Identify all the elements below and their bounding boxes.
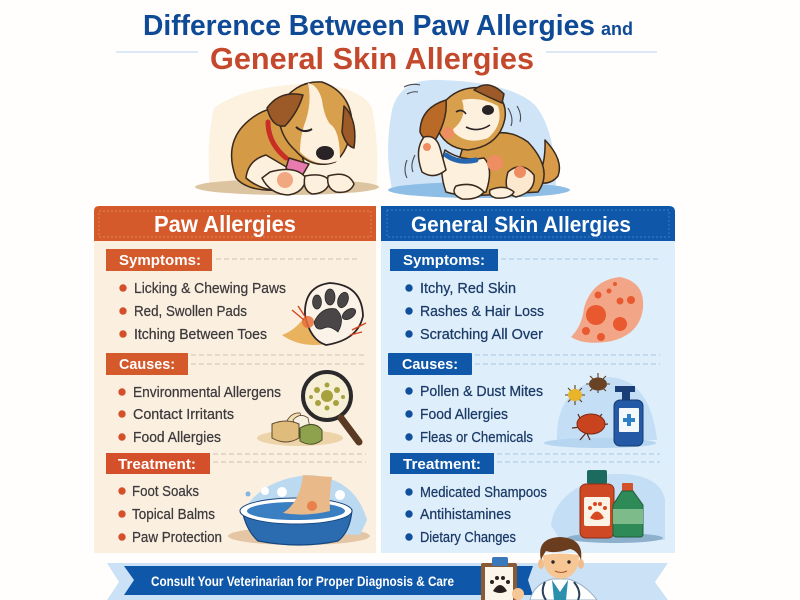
section: paw symptoms: Itching Between Toes <box>134 326 267 343</box>
section: paw causes: Environmental Allergens <box>133 384 281 401</box>
section: skin causes <box>388 353 660 446</box>
icon: veterinarian <box>512 537 597 600</box>
section: skin symptoms: Scratching All Over <box>420 326 543 343</box>
panel header: paw allergies: Paw Allergies <box>154 211 296 237</box>
title: and <box>601 19 633 39</box>
section: paw treatment: Treatment: <box>118 456 196 473</box>
illustration: dog scratching <box>388 80 570 199</box>
title <box>116 10 657 76</box>
section: paw symptoms <box>106 249 360 343</box>
panel: general skin allergies <box>381 206 675 553</box>
icon: magnifier and balms <box>257 372 359 446</box>
title: Difference Between Paw Allergies <box>143 10 595 42</box>
section: skin symptoms: Itchy, Red Skin <box>420 280 516 297</box>
section: skin symptoms: Symptoms: <box>403 252 485 269</box>
footer banner <box>107 563 668 600</box>
icon: clipboard with paw <box>481 557 517 600</box>
section: paw treatment: Topical Balms <box>132 506 215 523</box>
section: paw causes: Food Allergies <box>133 429 221 446</box>
section: skin causes: Causes: <box>402 356 458 373</box>
section: skin causes: Food Allergies <box>420 406 508 423</box>
panel header: paw allergies <box>94 206 376 241</box>
section: paw causes: Causes: <box>119 356 175 373</box>
icon: mites and shampoo <box>544 373 657 448</box>
panel header: general skin allergies <box>381 206 675 241</box>
title: General Skin Allergies <box>210 41 534 76</box>
section: skin symptoms: Rashes & Hair Loss <box>420 303 544 320</box>
footer banner: Consult Your Veterinarian for Proper Diagnosis & Care <box>151 573 454 589</box>
section: skin treatment: Medicated Shampoos <box>420 484 547 501</box>
section: skin treatment <box>390 453 660 546</box>
section: skin treatment: Dietary Changes <box>420 529 516 546</box>
section: paw treatment: Paw Protection <box>132 529 222 546</box>
panel header: general skin allergies: General Skin Allergies <box>411 212 631 237</box>
section: skin treatment: Antihistamines <box>420 506 511 523</box>
section: paw treatment: Foot Soaks <box>132 483 199 500</box>
section: skin symptoms <box>390 249 660 343</box>
section: paw causes <box>106 353 365 446</box>
section: skin treatment: Treatment: <box>403 456 481 473</box>
icon: medicine bottles <box>551 470 665 543</box>
section: paw symptoms: Licking & Chewing Paws <box>134 280 286 297</box>
section: skin causes: Pollen & Dust Mites <box>420 383 543 400</box>
section: paw symptoms: Red, Swollen Pads <box>134 303 247 320</box>
illustration: dog licking paw <box>195 82 379 195</box>
icon: irritated paw <box>282 283 366 345</box>
section: paw causes: Contact Irritants <box>133 406 234 423</box>
section: skin causes: Fleas or Chemicals <box>420 429 533 446</box>
section: paw treatment <box>106 453 366 546</box>
icon: skin rash patch <box>571 277 643 343</box>
icon: foot soak basin <box>228 475 370 545</box>
panel: paw allergies <box>94 206 376 553</box>
section: paw symptoms: Symptoms: <box>119 252 201 269</box>
